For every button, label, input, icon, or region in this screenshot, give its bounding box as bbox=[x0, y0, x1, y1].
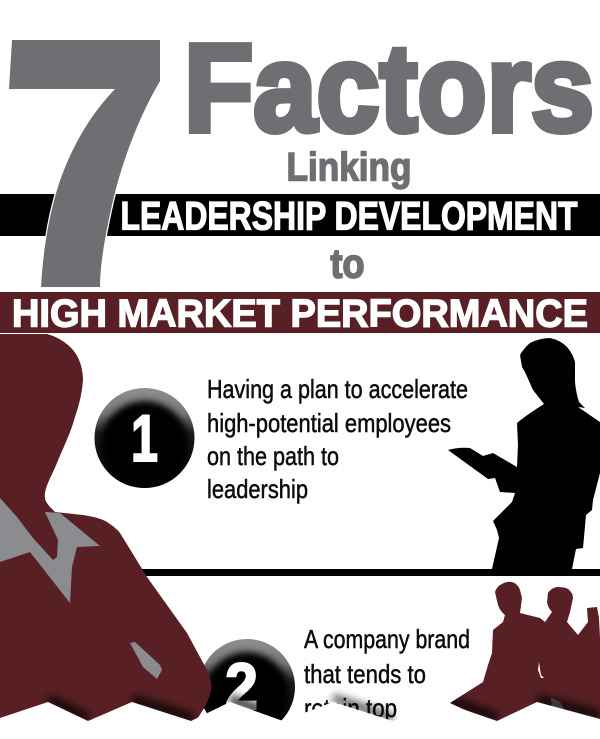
large maroon silhouette: businessperson bbox=[0, 334, 211, 725]
jacket pocket bbox=[130, 642, 162, 679]
silhouette: two colleagues bbox=[450, 582, 600, 725]
banner heading: high market performance: HIGH MARKET PERFORMANCE bbox=[12, 292, 588, 336]
silhouette gap between colleagues bbox=[538, 662, 544, 678]
shirt collar bbox=[0, 498, 100, 603]
section divider bbox=[130, 569, 600, 576]
black banner: leadership development bbox=[0, 194, 600, 236]
factor 2 number badge bbox=[204, 639, 295, 720]
shadow over cut-off text bbox=[333, 698, 393, 718]
torn paper bottom edge bbox=[0, 702, 600, 739]
factor 2 text bbox=[304, 624, 470, 723]
factor 2 text: retain top bbox=[304, 693, 397, 723]
factor 1 text: Having a plan to accelerate bbox=[207, 374, 468, 404]
factor 1 text: leadership bbox=[207, 474, 308, 504]
silhouette: woman reading bbox=[448, 338, 600, 569]
maroon banner bbox=[0, 292, 600, 333]
factor 1 number badge bbox=[94, 388, 194, 489]
torn edge shadow bbox=[48, 699, 600, 718]
connector word: to: to bbox=[330, 240, 364, 286]
factor 2 number badge: 2 bbox=[225, 649, 258, 723]
factor 2 text: that tends to bbox=[304, 659, 426, 689]
factor 1 text: high-potential employees bbox=[207, 408, 451, 438]
subtitle word: Linking: Linking bbox=[286, 146, 412, 190]
factor 1 text bbox=[207, 374, 468, 504]
factor 1 text: on the path to bbox=[207, 441, 339, 471]
factor 1 number badge: 1 bbox=[131, 401, 158, 475]
small grey detail at colleagues' base bbox=[551, 698, 566, 712]
large numeral 7 bbox=[9, 40, 160, 287]
factor 2 text: A company brand bbox=[304, 624, 470, 654]
